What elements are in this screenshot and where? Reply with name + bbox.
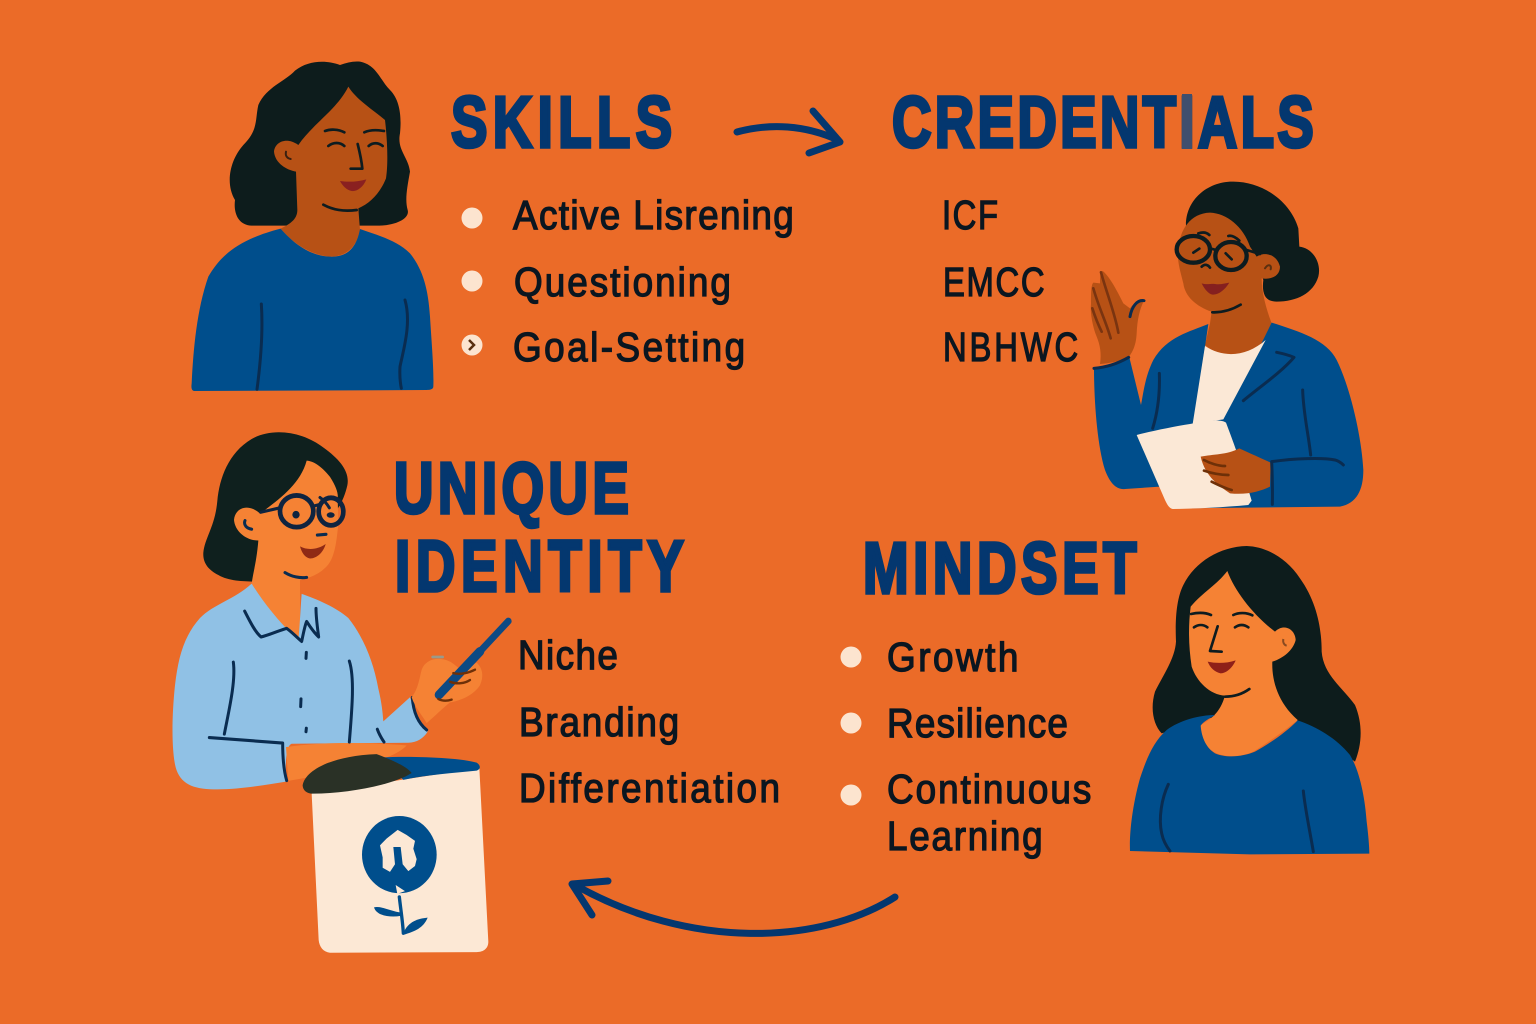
item: NBHWC: NBHWC [943,323,1078,370]
item: growth: Growth [887,635,1018,680]
heading: skills: SKILLS [451,82,672,163]
item: branding: Branding [519,700,679,745]
heading line: unique: UNIQUE [394,448,629,529]
list: skills [462,193,794,370]
heading: credentials: CREDENTIALS [892,82,1314,163]
arrow: skills to credentials [737,111,840,153]
item: niche: Niche [518,633,618,678]
list: credentials [942,191,1078,370]
bullet: questioning [462,270,482,292]
bullet: active listening [462,208,482,228]
item: continuous learning: Learning [887,814,1043,859]
bullet: growth [840,646,862,668]
item: resilience: Resilience [887,701,1068,746]
icon: hand and phone [412,621,508,723]
item: continuous learning [887,767,1091,859]
illustration: woman with long hair (mindset) [1130,546,1369,854]
item: questioning: Questioning [514,260,731,305]
illustration: woman in light blue shirt with phone and mug (unique identity) [172,432,508,953]
list: unique identity [518,633,780,811]
item: differentiation: Differentiation [519,766,780,811]
item: goal-setting: Goal-Setting [513,325,745,370]
bullet: continuous learning [840,784,862,806]
item: active listening: Active Lisrening [513,193,794,238]
heading: unique identity [394,448,684,607]
item: continuous learning: Continuous [887,767,1091,812]
icon: mug with logo [303,754,488,953]
arrow: mindset to unique identity [572,881,895,933]
illustration: woman in blue sweater (skills) [191,62,433,391]
heading line: identity: IDENTITY [395,526,684,607]
illustration: woman in blazer with tablet (credentials) [1091,182,1363,509]
heading: mindset: MINDSET [863,528,1137,609]
bullet: goal-setting [462,334,482,356]
list: mindset [840,635,1091,859]
item: ICF: ICF [942,191,998,238]
bullet: resilience [840,712,862,734]
item: EMCC: EMCC [943,258,1045,305]
